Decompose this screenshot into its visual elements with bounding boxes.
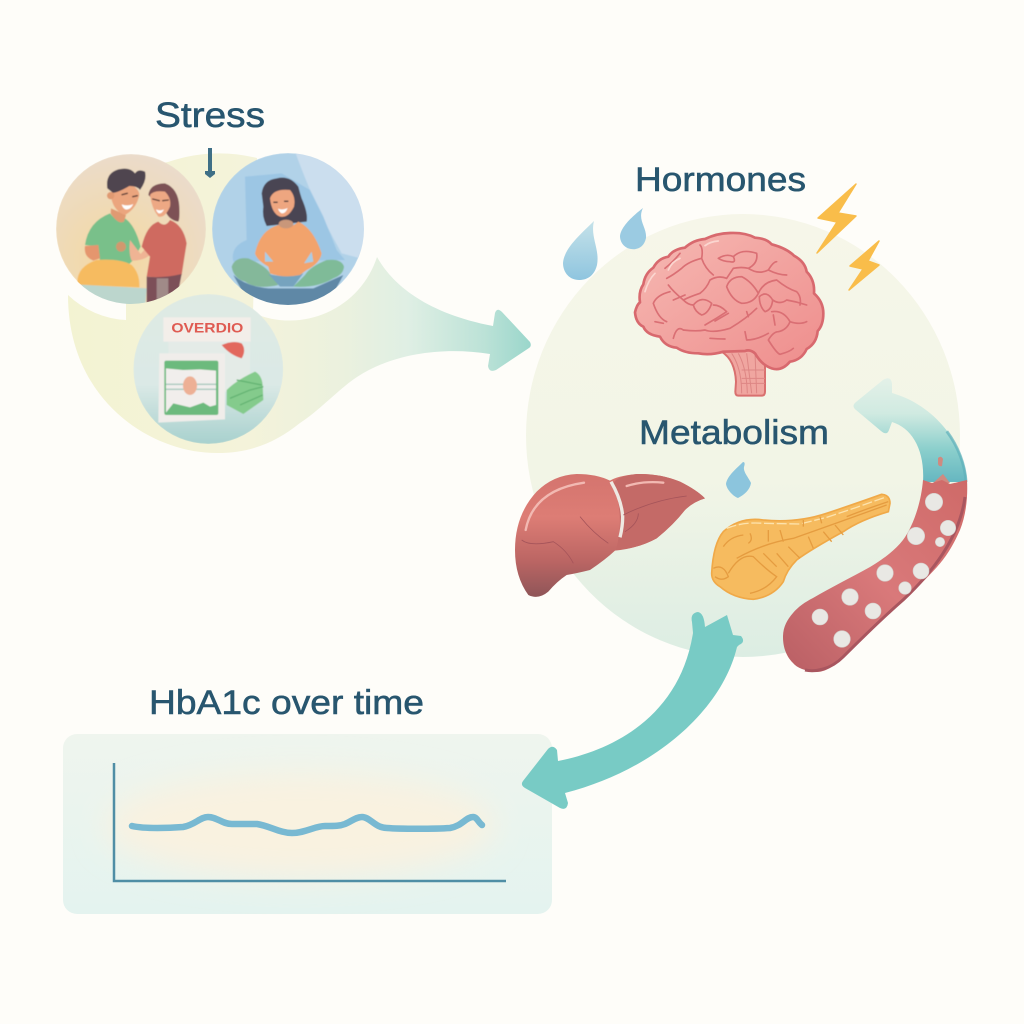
line: HbA1c trend xyxy=(132,817,482,833)
icon: water drop small xyxy=(620,208,646,249)
man face xyxy=(112,183,139,215)
icon: water drop metabolism xyxy=(726,462,751,498)
neck xyxy=(279,220,293,228)
green frame xyxy=(164,361,218,415)
brain outline xyxy=(635,233,823,369)
woman pants xyxy=(147,274,182,304)
arrow: metabolism to HbA1c xyxy=(522,612,743,809)
man eyes and brows xyxy=(122,193,137,197)
icon: pancreas xyxy=(712,494,890,599)
man hair xyxy=(107,169,146,193)
icon: brain xyxy=(635,233,823,396)
hair xyxy=(262,178,307,226)
man ear xyxy=(107,192,114,199)
pill xyxy=(183,376,197,395)
chart axes xyxy=(114,763,506,881)
man smile xyxy=(122,204,133,210)
brain stem xyxy=(722,350,765,396)
lobe divider xyxy=(611,482,623,537)
pillow xyxy=(77,260,139,287)
frame interior xyxy=(166,368,216,413)
eyes xyxy=(273,201,288,203)
pancreas highlight xyxy=(727,497,885,528)
big circle: hormones and metabolism xyxy=(526,214,960,657)
man neck xyxy=(111,208,126,222)
jeans lower xyxy=(233,275,343,307)
icon: blood vessel with glucose xyxy=(783,480,967,672)
cash lines xyxy=(230,380,263,405)
pancreas lobules xyxy=(713,502,888,593)
arrow outer band xyxy=(892,393,966,482)
banner xyxy=(163,317,251,342)
woman brows xyxy=(153,199,168,201)
woman smile xyxy=(156,209,164,213)
brain folds xyxy=(653,245,807,354)
document xyxy=(158,353,225,423)
arm gaps xyxy=(265,252,313,263)
light wall xyxy=(296,154,364,258)
pants highlight xyxy=(157,278,168,299)
box behind xyxy=(225,367,250,392)
liver veins xyxy=(522,496,687,563)
icon: lightning bolt large xyxy=(817,184,856,253)
arrow: stress down xyxy=(205,148,215,178)
heading: HbA1c over time: HbA1c over time xyxy=(149,684,424,722)
arrow: return arrow from vessel to circle xyxy=(854,378,967,483)
right lobe shade xyxy=(613,474,705,550)
man arm xyxy=(85,245,100,261)
vessel shade xyxy=(805,497,965,671)
banner text: OVERDIO xyxy=(171,320,243,336)
red tag xyxy=(222,342,244,358)
heading: Stress: Stress xyxy=(155,96,265,135)
deep wall xyxy=(233,173,345,262)
chest badge xyxy=(116,242,126,252)
woman face xyxy=(150,191,170,217)
left leg xyxy=(232,258,278,287)
man shirt xyxy=(85,213,141,265)
illustration: overdue bill circle xyxy=(133,294,283,444)
face xyxy=(270,190,294,217)
icon: liver xyxy=(515,474,705,597)
right leg xyxy=(293,260,344,287)
torso xyxy=(255,222,322,276)
illustration: family stress circle xyxy=(56,154,206,308)
panel: HbA1c chart xyxy=(63,734,552,914)
illustration: meditating woman circle xyxy=(212,150,367,307)
heading: Metabolism: Metabolism xyxy=(639,414,829,452)
woman shirt xyxy=(142,220,187,277)
flow blob from stress to hormones xyxy=(68,153,531,453)
brain highlights xyxy=(645,241,718,292)
stem lines xyxy=(732,353,765,393)
smile xyxy=(278,208,288,213)
heading: Hormones: Hormones xyxy=(635,161,806,199)
liver highlights xyxy=(526,482,663,530)
icon: lightning bolt small xyxy=(849,241,879,290)
jeans middle xyxy=(268,273,303,287)
icon: water drop large xyxy=(563,221,598,280)
lower teal band xyxy=(80,284,147,304)
glucose dots xyxy=(812,493,956,647)
cash stack xyxy=(227,372,263,414)
arrow spots xyxy=(933,457,950,483)
woman hair xyxy=(148,183,180,222)
chart glow xyxy=(105,773,495,877)
hand xyxy=(129,240,152,261)
frame line xyxy=(166,384,216,389)
